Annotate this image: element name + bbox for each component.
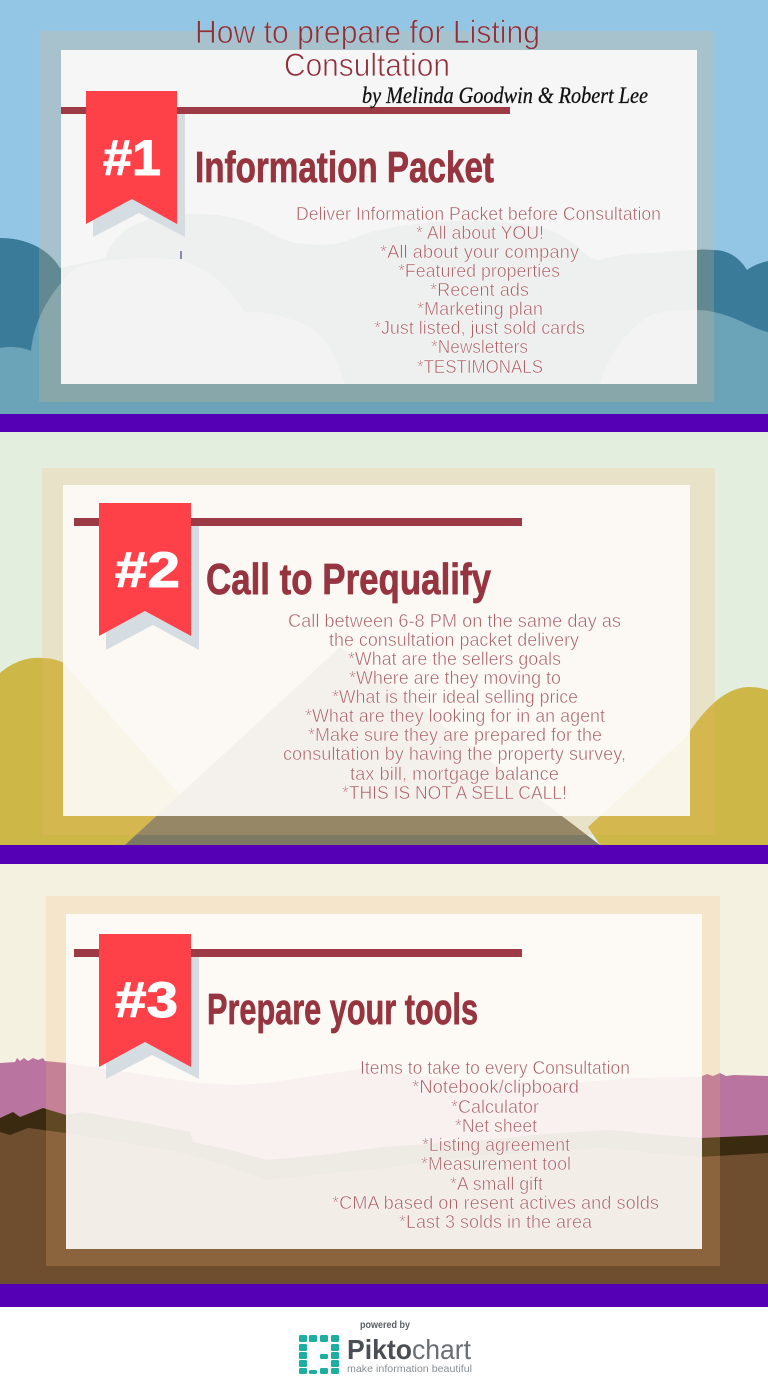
stray mark [180,251,182,259]
section 1 body text: *All about your company [380,241,580,262]
section 3 body text: *Calculator [451,1096,539,1117]
divider band 1 [0,414,768,432]
section 1 body text: Deliver Information Packet before Consultation [296,203,661,224]
section 3 panel [66,914,702,1249]
section 1 heading: Information Packet [195,143,494,192]
section 3 body text: *CMA based on resent actives and solds [332,1192,659,1213]
main title [195,14,540,83]
section 2 body text: *Where are they moving to [349,667,561,688]
section 2 body text: *What are they looking for in an agent [305,705,605,726]
section 2 frame [42,468,715,835]
section 1 ribbon badge [86,91,185,237]
section 3 heading: Prepare your tools [207,985,478,1034]
divider band 3 [0,1284,768,1307]
divider band 2 [0,845,768,864]
section 2 background: hills and mountain [0,432,768,845]
section 3 ribbon badge: #3 [115,972,178,1028]
section 3 background: layered landscape [0,864,768,1284]
byline: by Melinda Goodwin & Robert Lee [362,83,648,108]
section 1 background: sky and clouds [0,0,768,414]
section 1 panel [61,50,697,384]
section 3 body text: *A small gift [450,1173,543,1194]
section 3 body text: *Notebook/clipboard [412,1076,579,1097]
section 1 body text: *Recent ads [430,279,529,300]
tagline: make information beautiful [347,1364,472,1375]
section 2 divider bar [74,518,522,526]
section 2 body text: *THIS IS NOT A SELL CALL! [342,782,567,803]
section 3 divider bar [74,949,522,957]
section 1 body text [296,203,661,377]
section 2 body text: *What are the sellers goals [348,648,561,669]
section 2 ribbon badge: #2 [115,542,180,598]
section 3 frame [46,896,720,1266]
section 1 divider bar [61,107,510,114]
section 3 body text: *Measurement tool [421,1153,571,1174]
section 2 body text: *What is their ideal selling price [332,686,578,707]
section 1 body text: * All about YOU! [416,222,544,243]
section 1 body text: *Just listed, just sold cards [374,317,585,338]
section 2 ribbon badge [99,503,199,650]
section 1 ribbon badge: #1 [103,130,161,186]
section 3 body text: *Last 3 solds in the area [399,1211,593,1232]
section 3 body text [332,1057,659,1232]
icon: Piktochart logo [299,1335,339,1374]
section 3 body text: *Listing agreement [422,1134,570,1155]
section 1 body text: *Newsletters [431,336,528,357]
section 1 body text: *Marketing plan [417,298,543,319]
section 2 body text: the consultation packet delivery [329,629,580,650]
main title: How to prepare for Listing [195,14,540,50]
footer: Piktochart branding [299,1320,472,1375]
wordmark: Piktochart [347,1334,471,1365]
powered by: powered by [360,1320,410,1331]
section 1 frame [39,31,714,402]
section 2 body text [283,610,626,803]
section 2 heading: Call to Prequalify [206,555,491,604]
main title: Consultation [284,47,450,83]
section 2 body text: *Make sure they are prepared for the [308,724,602,745]
section 3 body text: *Net sheet [455,1115,537,1136]
section 2 body text: consultation by having the property survey, [283,743,626,764]
section 2 body text: Call between 6-8 PM on the same day as [288,610,621,631]
section 1 body text: *TESTIMONALS [417,356,543,377]
section 2 panel [63,485,690,816]
section 3 body text: Items to take to every Consultation [360,1057,630,1078]
section 1 body text: *Featured properties [398,260,560,281]
section 3 ribbon badge [99,934,199,1079]
section 2 body text: tax bill, mortgage balance [350,763,559,784]
